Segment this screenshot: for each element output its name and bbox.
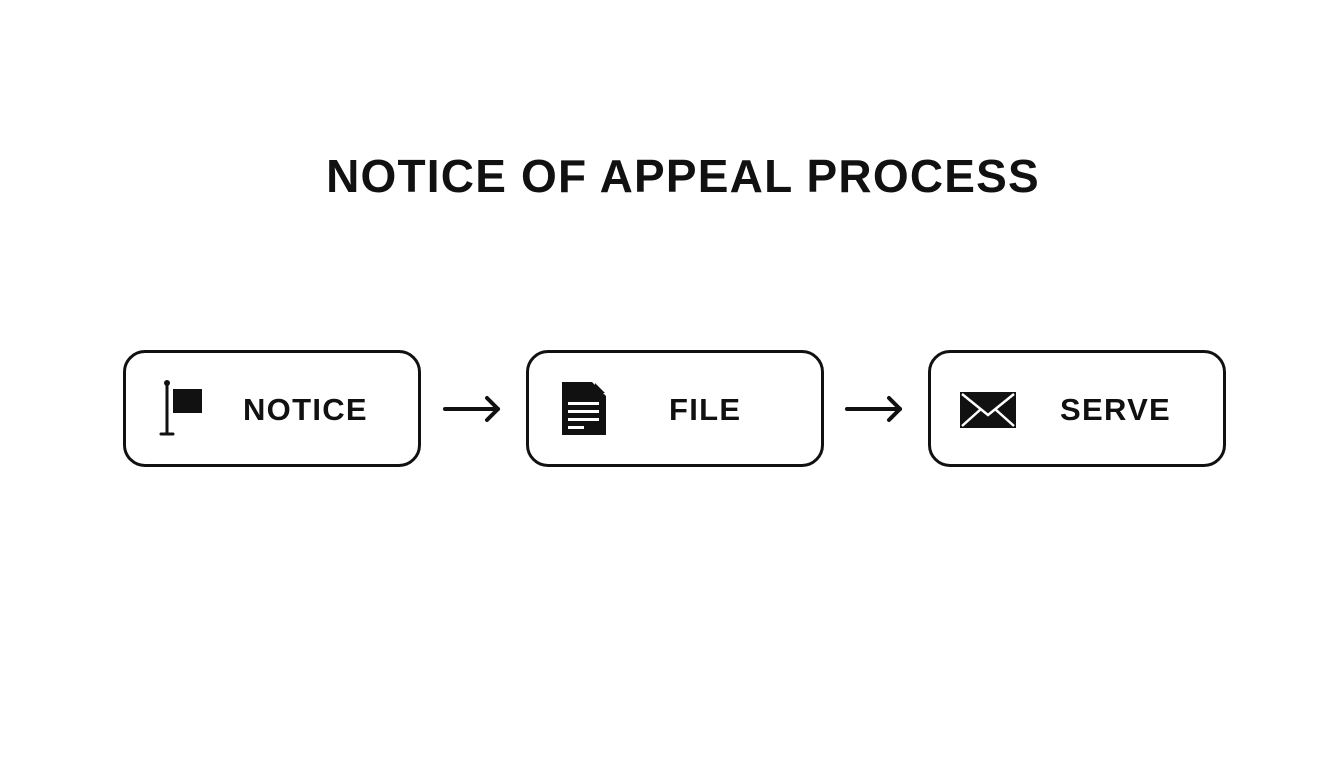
icon: flag [160, 380, 202, 436]
label: FILE [669, 392, 741, 427]
title: NOTICE OF APPEAL PROCESS [326, 150, 1040, 202]
step: file [526, 350, 824, 467]
icon: document [562, 382, 606, 435]
icon: envelope [960, 392, 1016, 428]
label: NOTICE [243, 392, 368, 427]
arrow 2 [845, 396, 902, 422]
step: notice [123, 350, 421, 467]
arrow 1 [443, 396, 500, 422]
label: SERVE [1060, 392, 1171, 427]
step: serve [928, 350, 1226, 467]
